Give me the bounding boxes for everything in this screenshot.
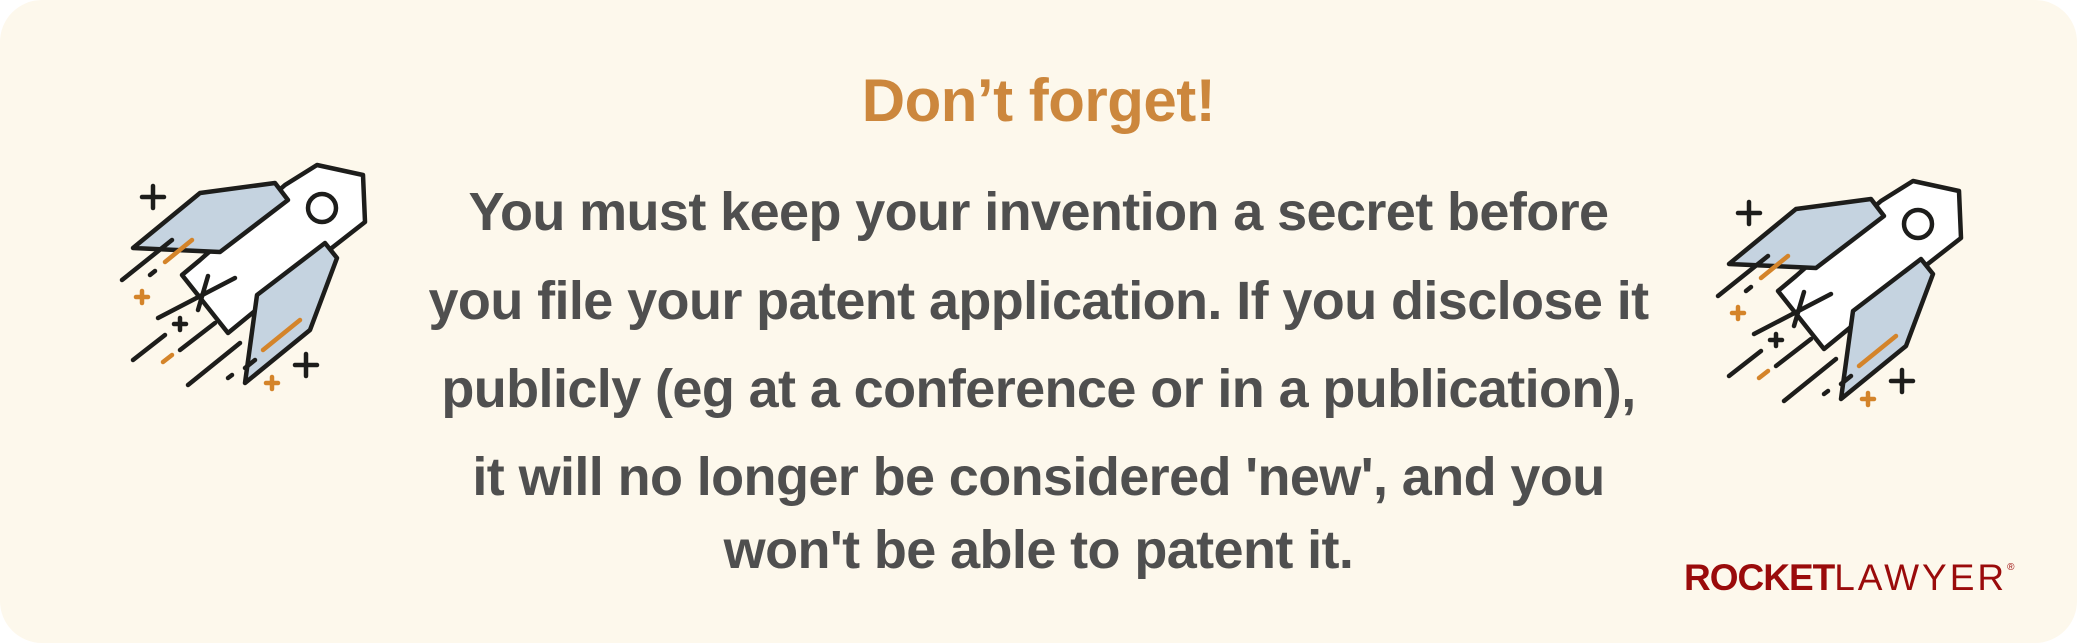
- body text: You must keep your invention a secret before: [469, 182, 1608, 242]
- body text: [428, 182, 1648, 580]
- icon: rocket right: [1716, 178, 1964, 408]
- body text: you file your patent application. If you disclose it: [428, 271, 1648, 331]
- logo: ROCKETLAWYER®: [1684, 557, 2014, 598]
- title: Don’t forget!: [862, 67, 1215, 134]
- body text: won't be able to patent it.: [724, 520, 1353, 580]
- icon: rocket left: [120, 162, 368, 392]
- body text: publicly (eg at a conference or in a publication),: [441, 359, 1636, 419]
- body text: it will no longer be considered 'new', and you: [472, 447, 1605, 507]
